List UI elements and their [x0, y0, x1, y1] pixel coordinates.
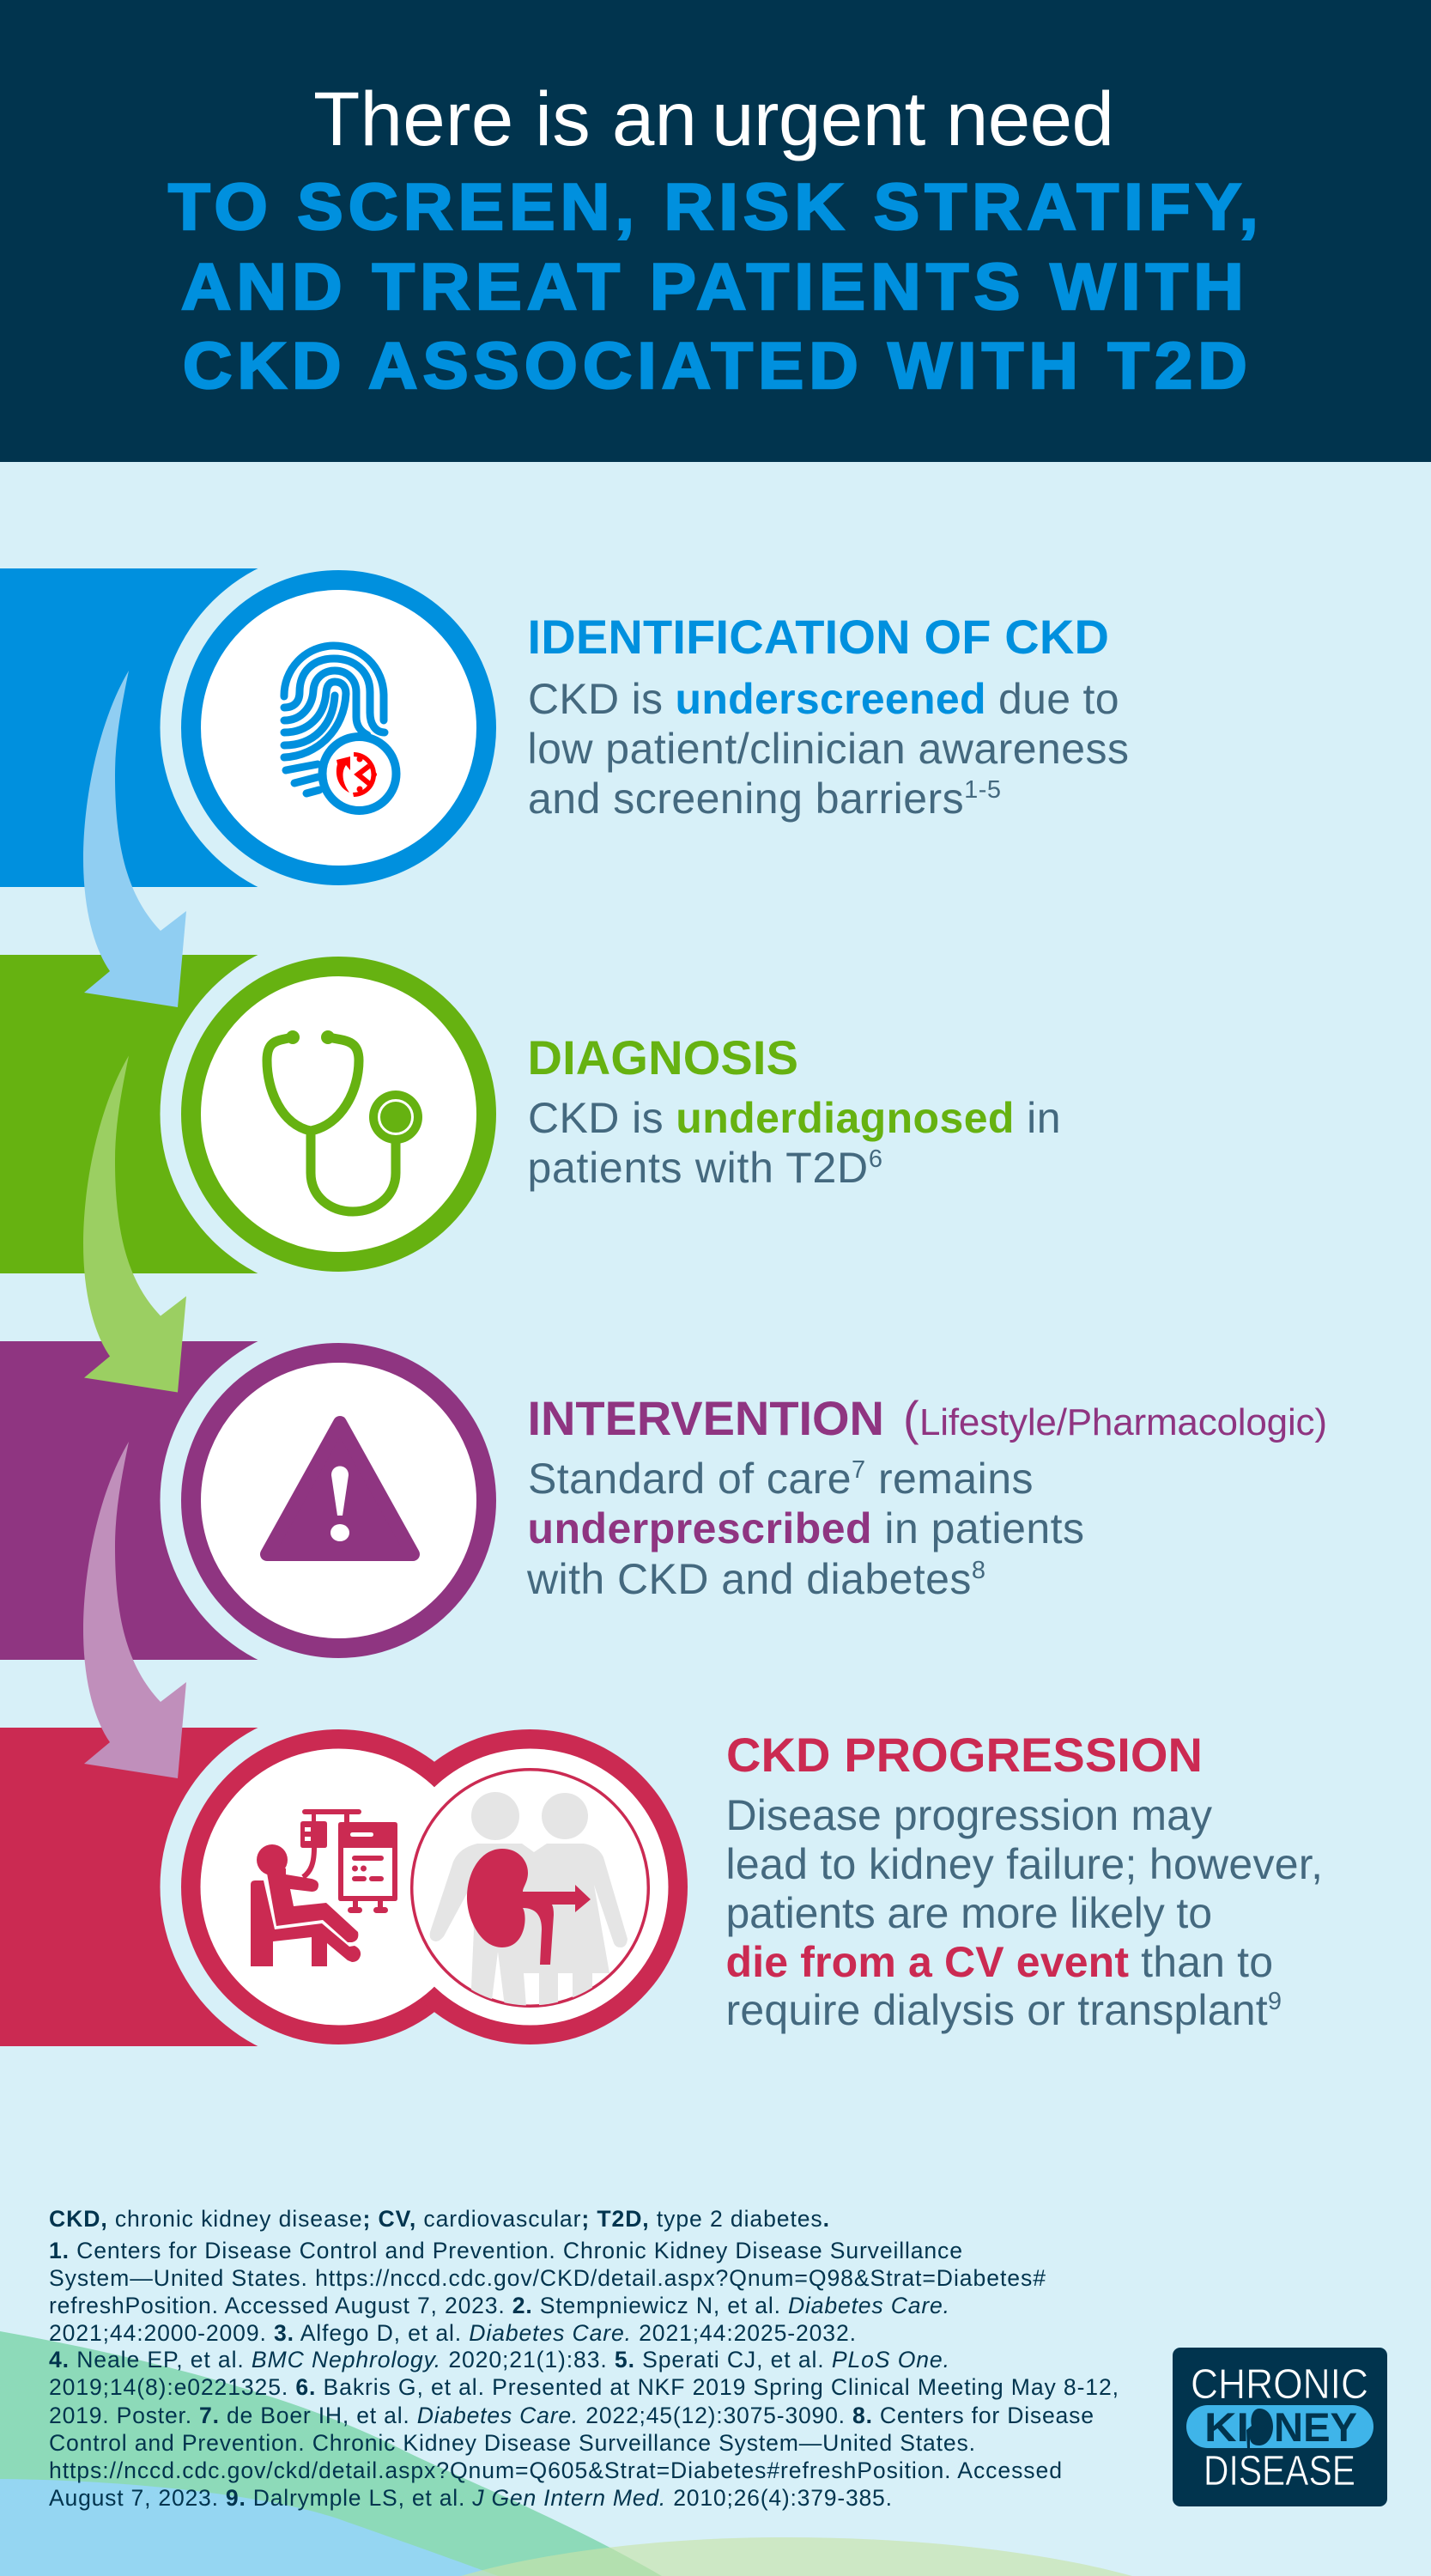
body text: intervention: 7 [852, 1456, 865, 1484]
body text: diagnosis: 6 [869, 1145, 882, 1173]
heading: CKD progression: CKD PROGRESSION [726, 1728, 1203, 1782]
blue band [0, 568, 275, 887]
body text: identification: CKD is underscreened due to [528, 675, 1119, 723]
body text: identification [527, 675, 1129, 823]
references: System—United States. https://nccd.cdc.gov/CKD/detail.aspx?Qnum=Q98&Strat=Diabetes# [49, 2265, 1046, 2291]
panel: identification of CKD [0, 550, 1129, 907]
body text: intervention [526, 1455, 1084, 1603]
body text: CKD progression [726, 1791, 1323, 2034]
body text: CKD progression: lead to kidney failure; however, [726, 1840, 1323, 1888]
logo: Chronic Kidney Disease [1173, 2348, 1387, 2506]
body text: CKD progression: die from a CV event than to [726, 1938, 1273, 1986]
body text: intervention: 8 [972, 1557, 985, 1584]
panel: diagnosis [0, 936, 1061, 1293]
title line: intro [313, 76, 1114, 161]
body text: diagnosis [527, 1094, 1061, 1192]
thin inner circle [412, 1770, 648, 2006]
body text: identification: 1-5 [964, 776, 1001, 804]
abbreviations: CKD, chronic kidney disease; CV, cardiovascular; T2D, type 2 diabetes. [49, 2206, 829, 2232]
icon: kidney in logo [1246, 2409, 1273, 2449]
body text: intervention: remains [866, 1455, 1034, 1503]
arrow: identification to diagnosis [83, 671, 186, 1007]
logo: Chronic Kidney Disease: NEY [1274, 2404, 1357, 2450]
body text: CKD progression: Disease progression may [726, 1791, 1212, 1839]
title: emphasised statement [168, 171, 1264, 403]
heading: intervention: INTERVENTION [527, 1391, 884, 1445]
logo pill [1186, 2405, 1373, 2448]
references: 2021;44:2000-2009. 3. Alfego D, et al. Diabetes Care. 2021;44:2025-2032. [49, 2320, 856, 2346]
title: emphasised statement: CKD ASSOCIATED WITH T2D [183, 330, 1252, 403]
body text: intervention: underprescribed in patients [527, 1504, 1084, 1552]
background wave shapes [0, 2331, 1132, 2576]
logo: Chronic Kidney Disease: CHRONIC [1191, 2361, 1368, 2408]
panel: intervention [0, 1322, 1327, 1680]
icon: couple with kidney [430, 1792, 628, 2007]
references: 4. Neale EP, et al. BMC Nephrology. 2020;21(1):83. 5. Sperati CJ, et al. PLoS One. [49, 2347, 949, 2372]
body text: identification: and screening barriers [528, 775, 964, 823]
halo ring [160, 550, 517, 907]
references: August 7, 2023. 9. Dalrymple LS, et al. J Gen Intern Med. 2010;26(4):379-385. [49, 2485, 892, 2511]
halo ring [160, 1709, 517, 2066]
logo: Chronic Kidney Disease: DISEASE [1204, 2448, 1355, 2494]
references: 2019;14(8):e0221325. 6. Bakris G, et al. Presented at NKF 2019 Spring Clinical Meeting May 8-12, [49, 2374, 1119, 2400]
purple circle [191, 1353, 486, 1649]
icon: warning triangle [267, 1423, 413, 1554]
icon: fingerprint with clock [284, 646, 397, 811]
references [49, 2238, 1119, 2511]
crimson band [0, 1728, 275, 2046]
halo ring [160, 1322, 517, 1680]
purple band [0, 1341, 275, 1660]
panel: CKD progression [0, 1728, 1319, 2046]
green band [0, 955, 275, 1273]
green circle [191, 967, 486, 1262]
title line: intro: urgent need [712, 76, 1114, 161]
icon: stethoscope [267, 1030, 422, 1212]
body text: diagnosis: patients with T2D [527, 1144, 868, 1192]
references: 1. Centers for Disease Control and Prevention. Chronic Kidney Disease Surveillance [49, 2238, 962, 2263]
body text: CKD progression: 9 [1268, 1988, 1282, 2015]
heading qualifier: Lifestyle/Pharmacologic) [919, 1401, 1327, 1443]
footnotes [49, 2206, 1119, 2511]
references: refreshPosition. Accessed August 7, 2023. 2. Stempniewicz N, et al. Diabetes Care. [49, 2293, 949, 2318]
arrow: diagnosis to intervention [83, 1056, 186, 1393]
icon: patient on dialysis [251, 1809, 397, 1966]
title line: intro: There is an [313, 76, 697, 161]
title: emphasised statement: AND TREAT PATIENTS WITH [181, 251, 1249, 324]
header banner [0, 0, 1431, 462]
halo ring [160, 936, 517, 1293]
body text: intervention: with CKD and diabetes [527, 1555, 971, 1603]
title: emphasised statement: TO SCREEN, RISK STRATIFY, [168, 171, 1264, 244]
references: 2019. Poster. 7. de Boer IH, et al. Diabetes Care. 2022;45(12):3075-3090. 8. Centers for Disease [49, 2403, 1094, 2428]
body text: intervention: Standard of care [528, 1455, 852, 1503]
logo: Chronic Kidney Disease: KI [1204, 2404, 1249, 2450]
references: https://nccd.cdc.gov/ckd/detail.aspx?Qnum=Q605&Strat=Diabetes#refreshPosition. Accessed [49, 2458, 1062, 2483]
heading: diagnosis: DIAGNOSIS [527, 1030, 798, 1084]
arrow: intervention to CKD progression [83, 1442, 186, 1778]
body text: identification: low patient/clinician awareness [527, 725, 1129, 773]
body text: CKD progression: require dialysis or transplant [726, 1986, 1268, 2034]
body text: CKD progression: patients are more likely to [726, 1889, 1212, 1937]
references: Control and Prevention. Chronic Kidney Disease Surveillance System—United States. [49, 2430, 975, 2456]
body text: diagnosis: CKD is underdiagnosed in [528, 1094, 1061, 1142]
blue circle [191, 580, 486, 876]
heading: identification: IDENTIFICATION OF CKD [527, 610, 1109, 664]
double circle [181, 1729, 688, 2044]
heading qualifier: ( [903, 1391, 919, 1445]
